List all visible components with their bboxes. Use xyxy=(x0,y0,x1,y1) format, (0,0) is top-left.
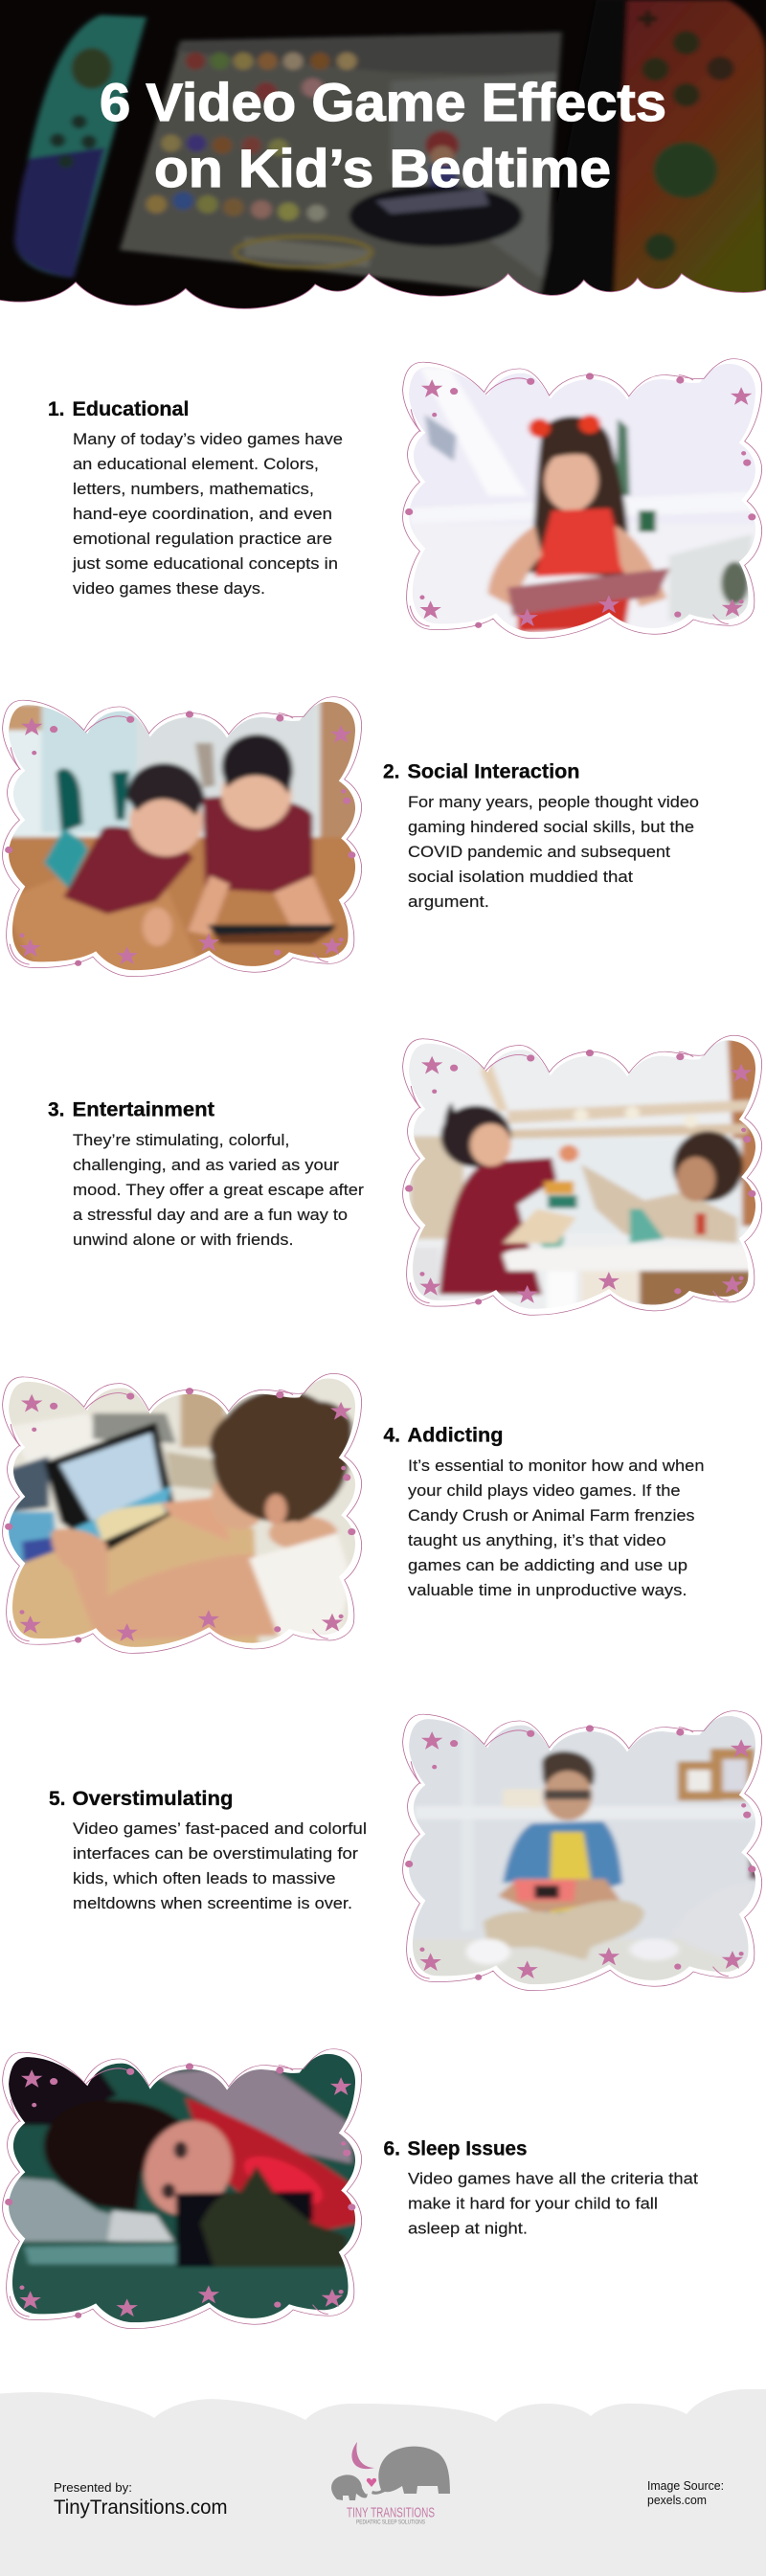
item 2 text: Social Interaction: Social Interaction xyxy=(408,760,580,783)
item 2 text: Social Interaction: gaming hindered social skills, but the xyxy=(408,819,694,836)
icon: heart xyxy=(367,2478,376,2487)
item 3 text: Entertainment: 3. xyxy=(48,1099,65,1120)
item 5 text: Overstimulating xyxy=(49,1788,367,1912)
item 3 text: Entertainment: challenging, and as varied as your xyxy=(73,1157,340,1174)
item 6 text: Sleep Issues: 6. xyxy=(383,2137,400,2160)
item 1 text: Educational: an educational element. Colors, xyxy=(73,456,319,473)
item 2 text: Social Interaction xyxy=(383,760,699,911)
item 6 text: Sleep Issues xyxy=(383,2137,698,2237)
item 5 text: Overstimulating: kids, which often leads to massive xyxy=(73,1870,335,1887)
item 5 text: Overstimulating: 5. xyxy=(49,1788,66,1810)
item 3 text: Entertainment: Entertainment xyxy=(73,1099,214,1120)
photo 5: boy with handheld console xyxy=(402,1710,762,1991)
photo 1: girl with tablet xyxy=(402,358,762,639)
item 4 text: Addicting xyxy=(383,1425,705,1599)
item 4 text: Addicting: Candy Crush or Animal Farm frenzies xyxy=(408,1507,695,1525)
item 1 text: Educational: 1. xyxy=(48,398,65,420)
item 5 text: Overstimulating: Overstimulating xyxy=(73,1788,234,1810)
item 1 text: Educational: emotional regulation practice are xyxy=(73,531,332,548)
item 1 text: Educational: Educational xyxy=(73,398,190,420)
icon: big elephant xyxy=(372,2447,450,2495)
item 2 text: Social Interaction: For many years, people thought video xyxy=(408,794,699,811)
item 6 text: Sleep Issues: make it hard for your child to fall xyxy=(408,2195,658,2212)
photo 4: boy with tablet at desk xyxy=(0,1367,372,1665)
item 3 text: Entertainment: mood. They offer a great escape after xyxy=(73,1182,365,1199)
footer: presented by: Presented by: xyxy=(54,2480,132,2495)
footer: image source xyxy=(647,2479,724,2507)
item 2 text: Social Interaction: social isolation muddied that xyxy=(408,869,633,886)
item 5 text: Overstimulating: interfaces can be overstimulating for xyxy=(73,1845,359,1863)
logo wordmark: TINY TRANSITIONS xyxy=(347,2505,435,2520)
photo 3: girls with wooden toys xyxy=(402,1034,762,1316)
title: 6 Video Game Effects xyxy=(100,72,666,132)
item 1 text: Educational: video games these days. xyxy=(73,580,265,598)
item 4 text: Addicting: Addicting xyxy=(408,1425,504,1446)
item 4 text: Addicting: taught us anything, it’s that video xyxy=(408,1532,666,1549)
item 2 text: Social Interaction: COVID pandemic and subsequent xyxy=(408,844,670,861)
icon: small elephant xyxy=(331,2474,368,2500)
photo 2: two boys on the floor xyxy=(2,696,362,977)
item 3 text: Entertainment: unwind alone or with friends. xyxy=(73,1232,293,1249)
item 3 text: Entertainment: They’re stimulating, colorful, xyxy=(73,1132,289,1149)
title xyxy=(100,72,666,198)
title: on Kid’s Bedtime xyxy=(154,138,611,198)
footer: presented by: TinyTransitions.com xyxy=(54,2497,228,2519)
item 5 text: Overstimulating: Video games’ fast-paced and colorful xyxy=(73,1820,367,1838)
footer: presented by xyxy=(54,2480,228,2519)
item 1 text: Educational: Many of today’s video games have xyxy=(73,431,343,448)
item 6 text: Sleep Issues: Sleep Issues xyxy=(408,2137,527,2160)
item 6 text: Sleep Issues: Video games have all the criteria that xyxy=(408,2170,698,2187)
item 4 text: Addicting: games can be addicting and use up xyxy=(408,1557,687,1574)
item 2 text: Social Interaction: argument. xyxy=(408,893,489,911)
item 4 text: Addicting: valuable time in unproductive ways. xyxy=(408,1582,687,1599)
item 3 text: Entertainment xyxy=(48,1099,365,1249)
logo tagline: PEDIATRIC SLEEP SOLUTIONS xyxy=(356,2520,425,2526)
header photo: game console xyxy=(0,0,766,325)
item 1 text: Educational: letters, numbers, mathematics, xyxy=(73,481,314,498)
item 4 text: Addicting: 4. xyxy=(383,1425,400,1446)
item 6 text: Sleep Issues: asleep at night. xyxy=(408,2220,528,2237)
item 2 text: Social Interaction: 2. xyxy=(383,760,400,783)
footer: image source: pexels.com xyxy=(647,2494,707,2507)
item 1 text: Educational: just some educational concepts in xyxy=(72,555,338,573)
item 3 text: Entertainment: a stressful day and are a fun way to xyxy=(73,1207,348,1224)
icon: crescent moon xyxy=(351,2442,374,2469)
item 1 text: Educational: hand-eye coordination, and even xyxy=(73,506,332,523)
item 1 text: Educational xyxy=(48,398,343,598)
logo: Tiny Transitions elephants xyxy=(331,2442,450,2526)
item 4 text: Addicting: your child plays video games. If the xyxy=(408,1482,680,1500)
footer background xyxy=(0,2389,766,2576)
footer: image source: Image Source: xyxy=(647,2479,724,2493)
photo 6: child with phone in bed xyxy=(0,2048,372,2347)
item 4 text: Addicting: It’s essential to monitor how and when xyxy=(408,1457,705,1475)
item 5 text: Overstimulating: meltdowns when screentime is over. xyxy=(73,1895,352,1912)
